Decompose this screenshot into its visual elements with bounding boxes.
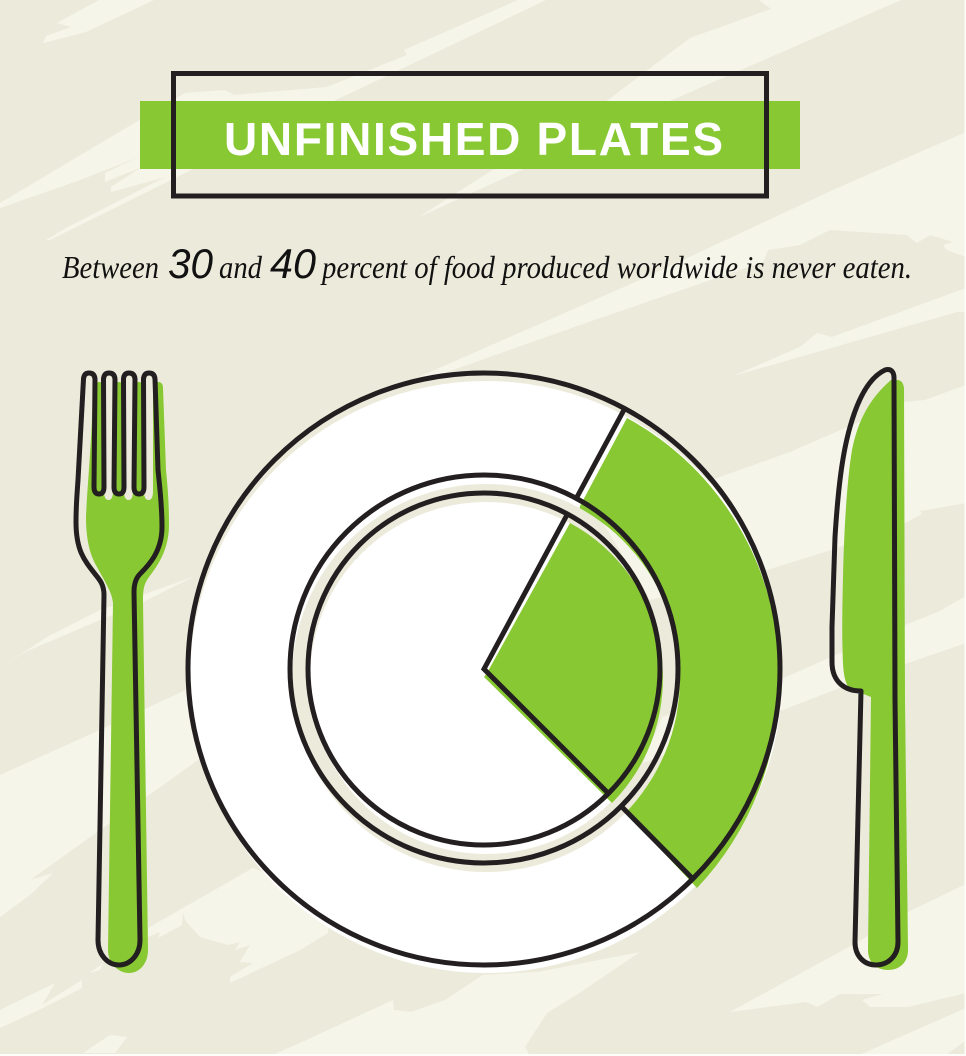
fork outline [76,373,162,965]
ring outlines [290,475,678,863]
subtitle: percent of food produced worldwide is never eaten. [320,249,912,285]
subtitle: 40 [270,240,317,287]
outer green wedge [560,418,779,888]
title frame [174,74,766,196]
subtitle: and [219,249,263,285]
wedge edge lines [484,408,692,878]
subtitle [62,240,912,287]
icon: fork [76,373,169,973]
plate white base [190,381,782,973]
subtitle: Between [62,249,159,285]
icon: knife [832,369,908,970]
knife green fill [842,380,908,970]
fork green fill [86,382,169,973]
title banner [140,74,800,196]
green title bar [140,101,800,169]
title text: UNFINISHED PLATES [224,113,723,165]
inner green wedge [484,523,663,803]
icon: plate pie chart [186,370,782,973]
plate outer rim outline [188,373,780,965]
subtitle: 30 [168,240,214,287]
inner ring band [292,484,680,872]
knife outline [832,369,898,965]
